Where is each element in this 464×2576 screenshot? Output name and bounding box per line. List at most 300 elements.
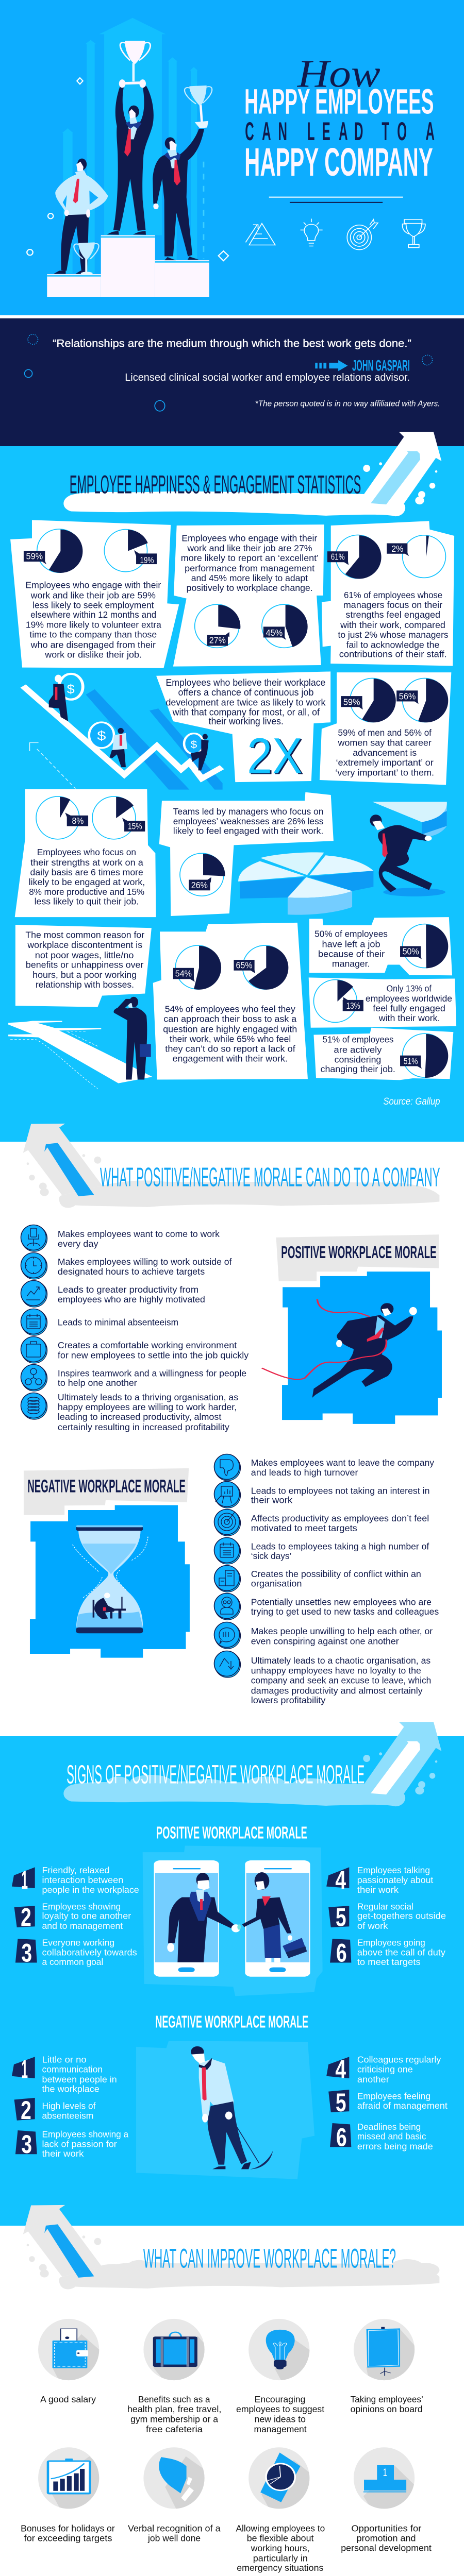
pie label: 8% xyxy=(65,812,88,826)
numbered signs 2, 3, 5 and 6: loyalty to one another xyxy=(42,1911,131,1921)
text block: with their work. xyxy=(378,1013,440,1023)
text block: list items: and leads to high turnover xyxy=(251,1467,358,1478)
text block: list items continued: Ultimately leads to a thriving organisation, as xyxy=(58,1392,238,1402)
icon: chart line xyxy=(21,1281,47,1307)
pie label: 13% xyxy=(343,997,363,1011)
numbered signs 2, 3, 5 and 6: collaboratively towards xyxy=(42,1947,137,1957)
text block xyxy=(25,580,161,659)
numbered signs right column xyxy=(326,2055,448,2152)
pie label: 65%: 65% xyxy=(236,961,253,971)
text block: list items continued: to help one another xyxy=(58,1378,137,1388)
icon: team xyxy=(21,1364,47,1391)
text block: list items continued: leading to increased productivity, almost xyxy=(58,1412,221,1422)
numbered signs left column: 2 xyxy=(21,2096,31,2125)
pie label: 50%: 50% xyxy=(403,947,419,957)
panel: signs of negative morale xyxy=(12,2013,448,2179)
centre employee holding trophy xyxy=(107,41,154,235)
icon: clock on paper xyxy=(260,2452,301,2502)
numbered signs 2, 3, 5 and 6: Everyone working xyxy=(42,1938,114,1947)
icon: wallet xyxy=(53,2329,88,2368)
numbered sign 4 xyxy=(326,1866,433,1895)
text block: list items xyxy=(58,1229,232,1327)
text block: offers a chance of continuous job xyxy=(178,687,313,698)
pie chart: 50% xyxy=(403,924,447,968)
numbered signs 2, 3, 5 and 6 xyxy=(14,1902,446,1968)
item: suggest new ideas: employees to suggest xyxy=(236,2404,324,2414)
text block: and 45% more likely to adapt xyxy=(191,573,308,583)
climbing figure 2 xyxy=(89,722,127,767)
numbered sign 4: their work xyxy=(357,1885,399,1895)
numbered signs left column: the workplace xyxy=(42,2084,100,2094)
item: bonuses: for exceeding targets xyxy=(24,2533,112,2543)
text block xyxy=(165,677,326,726)
panel: stat 61% and 2% xyxy=(322,521,454,666)
text block xyxy=(173,806,323,836)
numbered signs right column: criticising one xyxy=(357,2064,413,2074)
numbered sign 1: Friendly, relaxed xyxy=(42,1866,109,1875)
text block: Teams led by managers who focus on xyxy=(173,806,323,817)
text block: list items continued: for new employees to settle into the job quickly xyxy=(58,1350,248,1360)
podium xyxy=(47,235,209,297)
floor trophy xyxy=(74,242,99,275)
running employee breaking the finish ribbon xyxy=(262,1299,417,1398)
text block: list items: even conspiring against one another xyxy=(251,1636,399,1646)
pie label: 13%: 13% xyxy=(346,1001,360,1011)
numbered signs left column: their work xyxy=(42,2148,84,2159)
text block: list items: employees who are highly motivated xyxy=(58,1294,205,1304)
text block: who are disengaged from their xyxy=(30,640,156,650)
item: employee opinions xyxy=(351,2318,423,2414)
item: a good salary: A good salary xyxy=(40,2395,96,2404)
panel: career advancement 59% and 56% xyxy=(320,672,451,785)
header arrow swoosh xyxy=(23,2205,439,2289)
decorative rings xyxy=(25,334,433,411)
blue diagonal bars xyxy=(86,689,223,790)
panel: stat 59% and 19% xyxy=(10,520,179,668)
text block: workplace discontentment is xyxy=(27,940,142,950)
text block: list items: every day xyxy=(58,1239,98,1249)
text block: likely to feel engaged with their work. xyxy=(173,826,323,836)
pie chart: 27% xyxy=(195,604,239,648)
header arrow swoosh xyxy=(23,1124,439,1208)
section header: what can improve workplace morale xyxy=(23,2205,439,2289)
numbered signs left column: Employees showing a xyxy=(42,2129,128,2139)
illustration: handshake across two phones xyxy=(143,1845,323,1996)
text block xyxy=(321,1035,395,1074)
icon: target xyxy=(214,1510,240,1536)
numbered signs 2, 3, 5 and 6: of work xyxy=(357,1921,388,1931)
icon: first place podium: 1 xyxy=(383,2467,387,2479)
panel: weaknesses 26% xyxy=(159,792,334,916)
text block xyxy=(314,929,388,969)
text block: last list item xyxy=(251,1656,431,1705)
pie label: 2% xyxy=(387,543,409,556)
text block: list items continued: certainly resulting in increased profitability xyxy=(58,1422,229,1432)
title word: How: How xyxy=(297,52,380,95)
item: promotion xyxy=(341,2446,432,2553)
hourglass with worker inside xyxy=(73,1526,148,1633)
pie label: 26% xyxy=(189,877,211,890)
big trophy xyxy=(120,41,151,84)
big figure 2X xyxy=(247,728,304,785)
panel: signs of positive morale xyxy=(12,1823,446,1996)
disclaimer: *The person quoted is in no way affiliated with Ayers. xyxy=(255,399,440,408)
text block: their strengths at work on a xyxy=(30,857,143,868)
pie label: 45% xyxy=(263,626,286,640)
text block: relationship with bosses. xyxy=(36,979,134,990)
illustration: businessman at a crossroads xyxy=(8,997,153,1089)
text block xyxy=(181,533,319,593)
pie chart: 26% xyxy=(180,853,224,896)
left employee in shirt xyxy=(54,159,108,275)
pie chart: 45% xyxy=(262,604,306,648)
climbing figure 1 xyxy=(49,674,83,721)
pie chart: 59% xyxy=(350,678,394,722)
pie label: 19%: 19% xyxy=(140,555,154,565)
pie label: 45%: 45% xyxy=(266,628,283,638)
section header: signs of positive/negative workplace morale xyxy=(63,1722,441,1806)
icon: first place podium xyxy=(363,2465,406,2493)
text block: considering xyxy=(335,1055,381,1065)
quote text: “Relationships are the medium through which the best work gets done.” xyxy=(53,337,411,349)
numbered signs 2, 3, 5 and 6: 5 xyxy=(336,1903,346,1932)
text block: list items xyxy=(251,1458,439,1646)
item: suggest new ideas xyxy=(236,2318,324,2434)
panel: left a job because of manager 50% xyxy=(309,917,452,975)
numbered sign 1: 1 xyxy=(21,1866,28,1894)
item: flexible hours: emergency situations xyxy=(237,2563,323,2573)
right employee holding trophy xyxy=(153,86,212,260)
text block: list items: Leads to greater productivity from xyxy=(58,1284,198,1295)
icon: briefcase xyxy=(21,1336,47,1363)
text: NEGATIVE WORKPLACE MORALE xyxy=(27,1477,186,1496)
text block: engagement with their work. xyxy=(173,1054,288,1064)
text block: 54% of employees who feel they xyxy=(165,1004,295,1014)
text block: list items: their work xyxy=(251,1495,292,1505)
panel: positive workplace morale with running employee xyxy=(262,1234,442,1424)
pie label: 61%: 61% xyxy=(331,552,345,562)
icon: clock xyxy=(21,1253,47,1279)
pie chart: 59% xyxy=(37,529,81,572)
icon: suitcase xyxy=(153,2332,197,2367)
panel: actively changing job 51% xyxy=(313,1028,453,1080)
text block: time to the company than those xyxy=(29,630,157,639)
icon: buildings xyxy=(214,1565,240,1592)
climbing figure 1: $ xyxy=(67,683,75,697)
panel: morale improvements grid xyxy=(21,2318,432,2573)
item: benefits xyxy=(127,2318,221,2434)
pie label: 15% xyxy=(122,818,145,832)
text block: less likely to quit their job. xyxy=(35,896,139,907)
illustration: businessman lifting a slice of a 3D pie chart xyxy=(238,802,447,915)
text block: list items: motivated to meet targets xyxy=(251,1523,357,1533)
small trophy xyxy=(185,86,212,128)
pie label: 27% xyxy=(207,632,229,646)
text block: 50% of employees xyxy=(314,929,388,939)
item: suggest new ideas: management xyxy=(254,2424,307,2434)
icon: light bulb xyxy=(301,218,323,246)
numbered signs 2, 3, 5 and 6: Employees showing xyxy=(42,1902,121,1911)
numbered signs 2, 3, 5 and 6: 3 xyxy=(21,1939,32,1968)
panel: stat 27% and 45% xyxy=(173,524,324,667)
item: benefits: Benefits such as a xyxy=(138,2395,210,2404)
item: flexible hours: Allowing employees to xyxy=(236,2523,325,2533)
numbered signs left column: 1 xyxy=(21,2055,28,2083)
item: flexible hours: be flexible about xyxy=(247,2533,314,2543)
item: benefits: health plan, free travel, xyxy=(127,2404,221,2414)
blob bumps xyxy=(96,2259,439,2277)
text block: changing their job. xyxy=(321,1064,395,1074)
text block: 51% of employees xyxy=(323,1035,393,1045)
text block: list items continued: Inspires teamwork and a willingness for people xyxy=(58,1368,246,1378)
header arrow swoosh xyxy=(63,432,441,516)
text block: list items: Leads to minimal absenteeism xyxy=(58,1317,178,1327)
text block: development are twice as likely to work xyxy=(165,697,326,707)
item: flexible hours: working hours, xyxy=(251,2543,309,2553)
numbered signs 2, 3, 5 and 6: Regular social xyxy=(357,1902,413,1911)
pie chart: 61% xyxy=(336,535,380,579)
numbered sign 1: people in the workplace xyxy=(42,1885,139,1895)
numbered signs left column xyxy=(12,2055,128,2159)
text block: likely to be engaged at work, xyxy=(29,877,145,887)
pie label: 65% xyxy=(234,960,255,973)
panel: negative workplace morale with hourglass xyxy=(24,1468,190,1658)
text block: The most common reason for xyxy=(25,930,144,940)
numbered signs 2, 3, 5 and 6: to meet targets xyxy=(357,1957,421,1967)
text block: have left a job xyxy=(322,939,380,950)
pie label: 59% xyxy=(24,551,46,564)
dashed arrow xyxy=(29,742,75,789)
item: bonuses: Bonuses for holidays or xyxy=(21,2523,115,2533)
pie label: 59% xyxy=(341,696,363,709)
blue panel xyxy=(30,1505,190,1658)
numbered signs left column: 3 xyxy=(21,2130,32,2159)
pie label: 56% xyxy=(396,690,419,704)
text block: Employees who focus on xyxy=(37,847,136,857)
numbered signs left column: communication xyxy=(42,2064,103,2074)
text block: women say that career xyxy=(338,738,432,748)
text block: can approach their boss to ask a xyxy=(163,1014,296,1024)
climbing figure 3: $ xyxy=(191,739,197,751)
item: a good salary xyxy=(36,2318,101,2404)
pie label: 2%: 2% xyxy=(391,544,403,554)
text block: list items: Makes employees willing to work outside of xyxy=(58,1257,232,1267)
item: flexible hours: particularly in xyxy=(253,2553,308,2563)
heading tab xyxy=(24,1468,189,1515)
item: benefits: gym membership or a xyxy=(130,2414,218,2424)
icon: thumbs down xyxy=(214,1454,240,1481)
icon: thumbs-up glove xyxy=(159,2457,194,2501)
item: verbal recognition: Verbal recognition of a xyxy=(128,2523,221,2533)
icon: office chair xyxy=(21,1225,47,1251)
icon: calendar xyxy=(21,1309,47,1335)
text block: 8% more productive and 15% xyxy=(29,887,144,897)
illustration: dejected employee dragging a pickaxe xyxy=(136,2041,314,2179)
big figure 2X: 2X xyxy=(247,728,303,785)
numbered signs right column: another xyxy=(357,2075,389,2084)
text block: list items: Makes employees want to come to work xyxy=(58,1229,220,1239)
decorative dots and diamonds xyxy=(27,78,228,261)
panel: discontentment with bosses xyxy=(15,925,152,1007)
item: benefits: free cafeteria xyxy=(146,2424,203,2434)
illustration: employees climbing a falling chart xyxy=(23,674,223,790)
text block: work and like their job are 27% xyxy=(187,543,312,553)
text block: question are highly engaged with xyxy=(163,1024,297,1035)
text block: list items: ‘sick days’ xyxy=(251,1551,291,1561)
pie chart: 8% xyxy=(36,796,79,839)
pie chart: 56% xyxy=(403,678,447,722)
numbered signs right column: 4 xyxy=(335,2055,346,2083)
item: flexible hours xyxy=(236,2446,325,2573)
numbered signs right column: 6 xyxy=(336,2123,347,2152)
text block: Employees who believe their workplace xyxy=(165,677,325,688)
text block: work and like their job are 59% xyxy=(30,590,156,600)
numbered signs 2, 3, 5 and 6: 2 xyxy=(21,1903,31,1932)
icon: coin stack xyxy=(21,1393,47,1419)
numbered signs right column: 5 xyxy=(336,2088,346,2117)
text block xyxy=(25,930,144,990)
text block: list items continued: happy employees are willing to work harder, xyxy=(58,1402,237,1412)
numbered signs left column: Little or no xyxy=(42,2055,87,2064)
pie chart: 13% xyxy=(313,980,357,1022)
item: promotion: Opportunities for xyxy=(351,2523,422,2533)
numbered signs right column: Deadlines being xyxy=(357,2122,421,2132)
icon: trophy xyxy=(403,219,425,248)
pie label: 19% xyxy=(134,550,157,565)
pie label: 50% xyxy=(400,946,422,959)
numbered signs 2, 3, 5 and 6: 6 xyxy=(336,1939,347,1968)
icon: calendar xyxy=(214,1537,240,1564)
background arrows xyxy=(62,18,197,274)
pie label: 54% xyxy=(173,968,195,982)
text block: elsewhere within 12 months and xyxy=(30,609,156,620)
numbered signs left column: lack of passion for xyxy=(42,2139,117,2149)
panel: approach their boss 54% and 65% xyxy=(153,923,308,1080)
heading tab xyxy=(276,1234,439,1281)
numbered signs left column: High levels of xyxy=(42,2101,96,2111)
climbing figure 3 xyxy=(184,734,209,770)
text block: Employees who engage with their xyxy=(25,580,161,590)
numbered sign 1: interaction between xyxy=(42,1875,123,1885)
blue panel xyxy=(282,1272,442,1424)
pie chart: 65% xyxy=(243,945,287,989)
pie label: 59%: 59% xyxy=(343,698,360,707)
pie chart: 2% xyxy=(403,535,445,578)
list: effects of negative morale xyxy=(214,1454,439,1705)
item: promotion: promotion and xyxy=(357,2533,416,2543)
title xyxy=(244,52,435,184)
item: suggest new ideas: new ideas to xyxy=(255,2414,306,2424)
text block: their working lives. xyxy=(209,716,284,726)
text block: they can’t do so report a lack of xyxy=(165,1044,296,1054)
text block: list items: designated hours to achieve targets xyxy=(58,1266,205,1276)
icon: pyramid xyxy=(245,224,275,245)
quote band: John Gaspari xyxy=(25,334,440,411)
section header: what positive/negative morale can do xyxy=(23,1124,440,1208)
hero divider lines and icon row xyxy=(245,197,425,250)
item: suggest new ideas: Encouraging xyxy=(255,2395,305,2404)
icon: speech bubble xyxy=(214,1622,240,1649)
item: verbal recognition: job well done xyxy=(147,2533,201,2543)
text block: with that company for most, or all, of xyxy=(172,707,320,718)
text block: Only 13% of xyxy=(387,984,432,993)
pie chart: 15% xyxy=(92,796,136,839)
pie label: 51% xyxy=(400,1056,422,1069)
section header: employee happiness and engagement statistics xyxy=(63,432,441,516)
text block: because of their xyxy=(318,949,385,959)
icon: down arrow line chart xyxy=(214,1651,240,1677)
white zigzag arrow line xyxy=(23,686,222,778)
text block: positively to workplace change. xyxy=(187,583,313,593)
text block: less likely to seek employment xyxy=(32,600,154,610)
text block: more likely to report an ‘excellent’ xyxy=(181,553,319,563)
blob waves xyxy=(107,1775,328,1790)
text block: Employees who engage with their xyxy=(181,533,317,544)
arrow icon xyxy=(315,360,347,371)
text block: ‘extremely important’ or xyxy=(336,757,434,768)
numbered sign 4: 4 xyxy=(335,1866,346,1894)
icon: light bulb xyxy=(266,2330,295,2369)
pie label: 61% xyxy=(327,551,349,565)
text block xyxy=(335,727,434,778)
pie chart: 54% xyxy=(175,945,220,989)
attribution role: Licensed clinical social worker and employee relations advisor. xyxy=(125,371,410,383)
text block: employees’ weaknesses are 26% less xyxy=(173,816,323,826)
pie chart: 51% xyxy=(403,1033,447,1077)
text block: their work, while 65% who feel xyxy=(170,1034,291,1044)
pie label: 27%: 27% xyxy=(209,635,226,645)
numbered signs 2, 3, 5 and 6: a common goal xyxy=(42,1957,103,1967)
text block: daily basis are 6 times more xyxy=(30,867,143,877)
icon: flip board xyxy=(367,2327,400,2376)
list: effects of positive morale xyxy=(21,1225,248,1432)
text block: are actively xyxy=(334,1045,382,1055)
item: verbal recognition xyxy=(128,2446,221,2543)
text block: benefits or unhappiness over xyxy=(26,960,143,970)
pie label: 54%: 54% xyxy=(175,969,192,978)
text block: not poor wages, little/no xyxy=(35,950,134,960)
text block: manager. xyxy=(332,959,370,969)
text block: list items continued: Creates a comfortable working environment xyxy=(58,1341,237,1350)
text block: list items continued xyxy=(58,1341,248,1432)
panel: continuous job development, twice as likely xyxy=(156,671,330,785)
item: bonuses xyxy=(21,2446,115,2543)
text block xyxy=(338,590,449,659)
text block: performance from management xyxy=(185,563,314,573)
numbered signs left column: between people in xyxy=(42,2075,117,2084)
pie label: 26%: 26% xyxy=(191,880,208,890)
text block: last list item: lowers profitability xyxy=(251,1696,326,1705)
icon: target with arrow xyxy=(347,219,378,250)
numbered sign 1 xyxy=(12,1866,139,1895)
text block: 19% more likely to volunteer extra xyxy=(26,620,161,630)
pie label: 51%: 51% xyxy=(404,1057,418,1066)
title line: can lead to a: CANLEADTOA xyxy=(245,117,435,146)
climbing figure 2: $ xyxy=(97,729,106,743)
header arrow swoosh xyxy=(63,1722,441,1806)
panel: only 13% fully engaged xyxy=(309,977,456,1028)
text block: list items: organisation xyxy=(251,1579,302,1588)
numbered signs left column: absenteeism xyxy=(42,2111,93,2121)
big figure 2X: 2X xyxy=(248,729,304,785)
icon: presentation board xyxy=(214,1482,240,1508)
hero illustration: employees on a podium with trophies xyxy=(27,18,228,297)
numbered signs 2, 3, 5 and 6: and to management xyxy=(42,1921,123,1931)
icon: bar chart clipboard xyxy=(47,2459,91,2494)
pie chart: 19% xyxy=(104,530,147,572)
text block xyxy=(163,1004,297,1064)
item: employee opinions: opinions on board xyxy=(351,2404,423,2414)
